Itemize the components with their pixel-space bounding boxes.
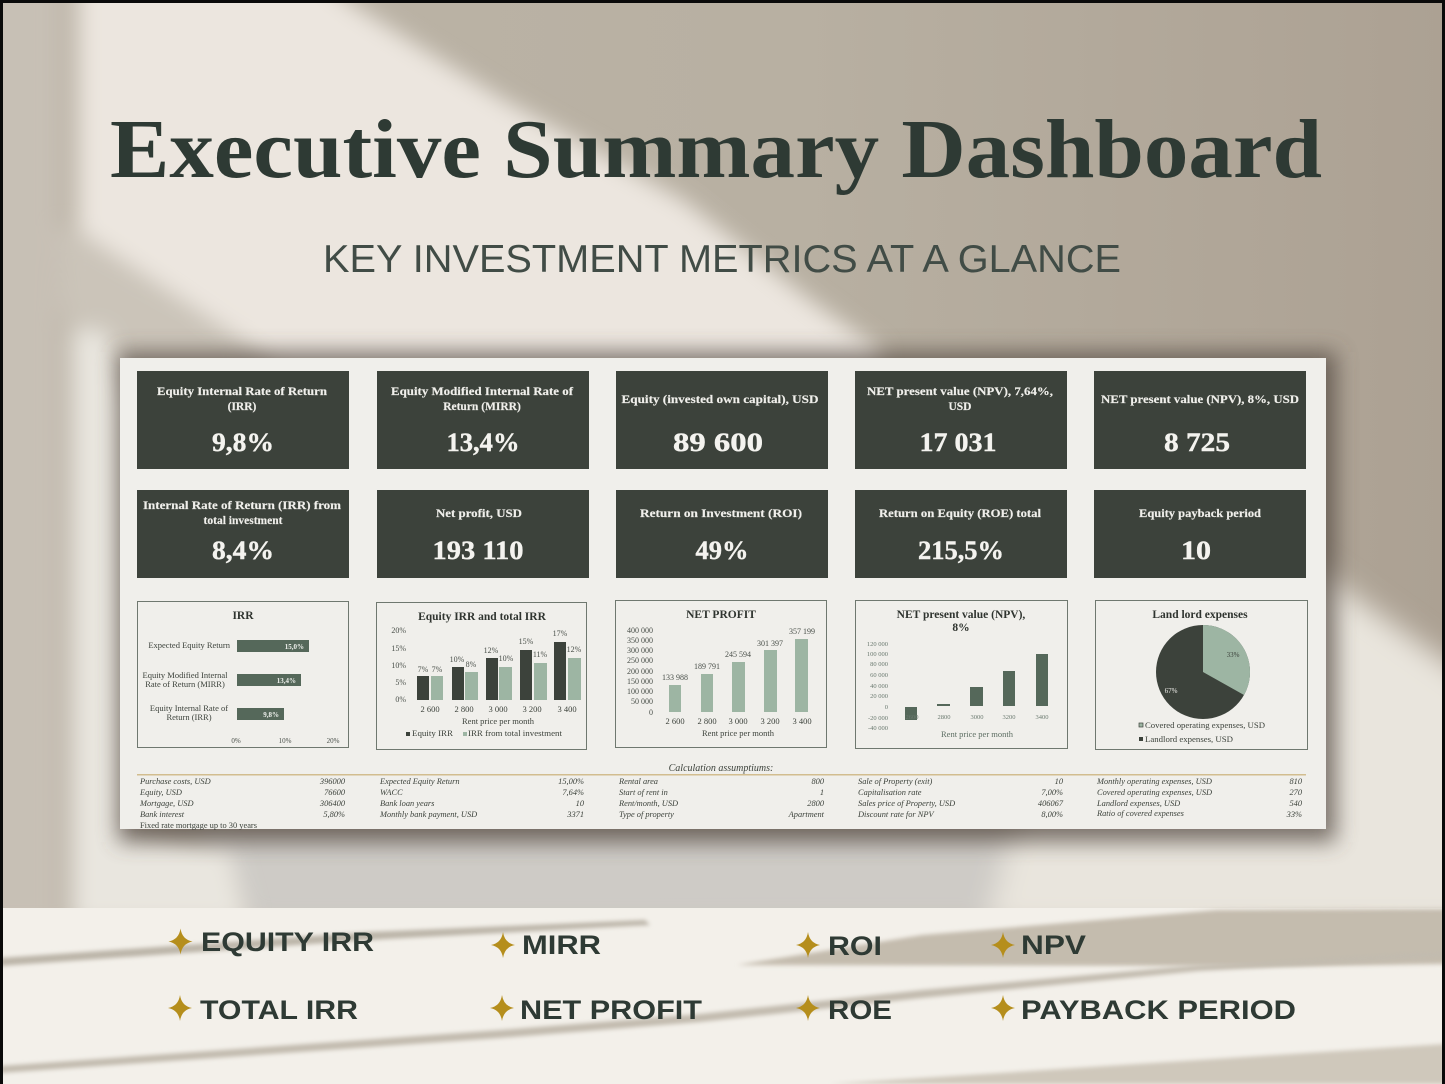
assumptions column 1: Bank interest xyxy=(140,810,185,819)
assumptions column 2: 15,00% xyxy=(558,777,584,786)
chart: net profit xyxy=(616,600,826,748)
chart: NPV 8%: 20 000 xyxy=(870,693,888,700)
KPI card: equity MIRR: 13,4% xyxy=(446,428,520,457)
KPI card: total IRR: total investment xyxy=(204,515,283,527)
assumptions column 5: 33% xyxy=(1286,810,1302,819)
item: payback period: PAYBACK PERIOD xyxy=(1021,995,1296,1025)
assumptions column 1: Fixed rate mortgage up to 30 years xyxy=(140,821,257,830)
chart: net profit: 100 000 xyxy=(627,687,653,696)
chart: net profit: 2 600 xyxy=(665,716,685,726)
assumptions column 4: 406067 xyxy=(1038,799,1064,808)
assumptions column 3: Rent/month, USD xyxy=(618,799,678,808)
KPI card: net profit xyxy=(377,490,589,578)
assumptions column 2: Expected Equity Return xyxy=(379,777,460,786)
chart: IRR horizontal bars: 9,8% xyxy=(263,711,279,719)
chart: equity IRR and total IRR: 3 400 xyxy=(557,704,577,714)
KPI card: NPV 7,64%: 17 031 xyxy=(920,428,996,457)
assumptions column 4: Sale of Property (exit) xyxy=(858,777,933,786)
chart: net profit: 301 397 xyxy=(757,639,783,648)
background: floor with shadow streaks xyxy=(0,908,1445,1084)
KPI card: ROI xyxy=(616,490,828,578)
chart: NPV 8%: 60 000 xyxy=(870,672,888,679)
assumptions column 2 xyxy=(379,777,585,819)
chart: equity IRR and total IRR: 2 800 xyxy=(454,704,474,714)
chart: NPV 8%: 2800 xyxy=(938,714,950,721)
chart: equity IRR and total IRR: 3 000 xyxy=(488,704,508,714)
assumptions column 3: Type of property xyxy=(619,810,674,819)
chart: NPV 8%: 2600 xyxy=(906,714,918,721)
assumptions column 3: 2800 xyxy=(807,799,825,808)
KPI card: ROI: Return on Investment (ROI) xyxy=(640,508,802,520)
assumptions column 1: 396000 xyxy=(319,777,346,786)
item: ROI xyxy=(796,931,882,961)
assumptions column 3 xyxy=(618,777,825,819)
chart: NPV 8%: Rent price per month xyxy=(941,729,1014,739)
assumptions column 5: Covered operating expenses, USD xyxy=(1097,788,1212,797)
chart: equity IRR and total IRR: 3 200 xyxy=(522,704,542,714)
chart: net profit: NET PROFIT xyxy=(686,609,756,621)
assumptions column 4: 10 xyxy=(1055,777,1064,786)
chart: equity IRR and total IRR: 7% xyxy=(418,665,429,674)
item: equity IRR: EQUITY IRR xyxy=(201,927,374,957)
chart: equity IRR and total IRR: 10% xyxy=(450,655,465,664)
subtitle: KEY INVESTMENT METRICS AT A GLANCE xyxy=(323,238,1121,281)
chart: IRR horizontal bars: 20% xyxy=(327,737,340,745)
chart: net profit: 400 000 xyxy=(627,626,653,635)
assumptions column 1: Equity, USD xyxy=(139,788,182,797)
assumptions column 3: 800 xyxy=(811,777,825,786)
KPI card: payback: Equity payback period xyxy=(1139,508,1262,520)
chart: equity IRR and total IRR: Rent price per month xyxy=(462,716,535,726)
chart: IRR horizontal bars: Rate of Return (MIRR) xyxy=(145,679,225,689)
KPI card: equity invested xyxy=(616,371,828,469)
chart: net profit: 0 xyxy=(649,708,653,717)
KPI card: equity IRR: (IRR) xyxy=(228,401,257,413)
chart: NPV 8%: 3200 xyxy=(1002,714,1016,721)
assumptions column 1: Mortgage, USD xyxy=(139,799,194,808)
chart: equity IRR and total IRR: 12% xyxy=(484,646,499,655)
assumptions column 2: Bank loan years xyxy=(380,799,434,808)
chart: landlord expenses pie: 33% xyxy=(1227,651,1240,659)
chart: net profit: 357 199 xyxy=(789,627,815,636)
metric list with gold stars xyxy=(168,927,1296,1025)
chart: NPV 8%: 80 000 xyxy=(870,661,888,668)
chart: equity IRR and total IRR: 5% xyxy=(395,678,406,687)
assumptions column 1 xyxy=(139,777,346,830)
item: net profit: NET PROFIT xyxy=(520,995,703,1025)
chart: IRR horizontal bars: Equity Modified Internal xyxy=(143,670,228,680)
KPI card: equity IRR: 9,8% xyxy=(212,428,274,457)
item: MIRR: MIRR xyxy=(522,930,601,960)
KPI card: equity invested: 89 600 xyxy=(673,428,763,457)
chart: net profit: 3 400 xyxy=(792,716,812,726)
chart: equity IRR and total IRR: IRR from total investment xyxy=(468,728,563,738)
chart: landlord expenses pie xyxy=(1096,600,1308,750)
chart: IRR horizontal bars: Return (IRR) xyxy=(166,712,212,722)
chart: net profit: 350 000 xyxy=(627,636,653,645)
chart: IRR horizontal bars xyxy=(138,602,348,748)
assumptions column 1: 306400 xyxy=(319,799,346,808)
KPI card: total IRR: 8,4% xyxy=(212,536,274,565)
item: ROE xyxy=(796,995,892,1025)
KPI card: ROI: 49% xyxy=(696,536,748,565)
KPI card: NPV 8%: 8 725 xyxy=(1164,428,1230,457)
KPI card: equity MIRR: Equity Modified Internal Rate of xyxy=(391,386,573,398)
KPI card: NPV 8% xyxy=(1094,371,1306,469)
assumptions column 2: 10 xyxy=(576,799,585,808)
chart: NPV 8%: -40 000 xyxy=(868,725,888,732)
assumptions column 5: 810 xyxy=(1289,777,1303,786)
chart: equity IRR and total IRR: 10% xyxy=(391,661,406,670)
assumptions column 2: 3371 xyxy=(566,810,584,819)
chart: IRR horizontal bars: 15,0% xyxy=(285,643,304,651)
assumptions column 4: 7,00% xyxy=(1041,788,1063,797)
chart: net profit: 200 000 xyxy=(627,667,653,676)
chart: IRR horizontal bars: IRR xyxy=(232,610,254,622)
chart: landlord expenses pie: Land lord expenses xyxy=(1152,609,1248,621)
assumptions column 1: 76600 xyxy=(324,788,346,797)
assumptions column 5: 270 xyxy=(1289,788,1303,797)
title: Executive Summary Dashboard xyxy=(110,103,1322,196)
KPI card: net profit: Net profit, USD xyxy=(436,508,522,520)
assumptions column 4: 8,00% xyxy=(1041,810,1063,819)
chart: net profit: 50 000 xyxy=(631,697,653,706)
item: NPV xyxy=(991,930,1086,960)
KPI card: NPV 7,64% xyxy=(855,371,1067,469)
chart: equity IRR and total IRR: 15% xyxy=(519,637,534,646)
assumptions column 5 xyxy=(1096,777,1303,819)
chart: equity IRR and total IRR: 0% xyxy=(395,695,406,704)
chart: IRR horizontal bars: Expected Equity Return xyxy=(148,640,231,650)
chart: equity IRR and total IRR: 20% xyxy=(391,626,406,635)
chart: net profit: 133 988 xyxy=(662,673,688,682)
KPI card: NPV 8%: NET present value (NPV), 8%, USD xyxy=(1101,394,1299,406)
chart: NPV 8%: 3000 xyxy=(970,714,984,721)
chart: net profit: 150 000 xyxy=(627,677,653,686)
chart: net profit: 3 000 xyxy=(728,716,748,726)
chart: equity IRR and total IRR: 2 600 xyxy=(420,704,440,714)
KPI card: NPV 7,64%: USD xyxy=(948,401,972,413)
assumptions column 3: 1 xyxy=(820,788,824,797)
chart: equity IRR and total IRR: 7% xyxy=(432,665,443,674)
calculation assumptions table: Calculation assumptiums: xyxy=(669,763,773,774)
chart: equity IRR and total IRR: Equity IRR and total IRR xyxy=(418,611,547,623)
chart: landlord expenses pie: 67% xyxy=(1165,687,1178,695)
KPI card: payback xyxy=(1094,490,1306,578)
KPI card: equity IRR xyxy=(137,371,349,469)
chart: equity IRR and total IRR: Equity IRR xyxy=(412,728,453,738)
chart: equity IRR and total IRR: 15% xyxy=(391,644,406,653)
chart: NPV 8% xyxy=(856,600,1068,748)
item: ROE: ROE xyxy=(828,995,892,1025)
chart: equity IRR and total IRR xyxy=(376,602,586,750)
chart: net profit: 189 791 xyxy=(694,662,720,671)
assumptions column 5: 540 xyxy=(1289,799,1303,808)
assumptions column 4: Capitalisation rate xyxy=(858,788,922,797)
assumptions column 3: Rental area xyxy=(618,777,658,786)
assumptions column 2: WACC xyxy=(380,788,403,797)
chart: NPV 8%: 0 xyxy=(885,704,888,711)
chart: net profit: 3 200 xyxy=(760,716,780,726)
KPI card: total IRR: Internal Rate of Return (IRR) from xyxy=(143,500,341,512)
assumptions column 3: Apartment xyxy=(788,810,825,819)
chart: net profit: 2 800 xyxy=(697,716,717,726)
calculation assumptions table xyxy=(137,763,1306,830)
chart: NPV 8%: 40 000 xyxy=(870,683,888,690)
KPI card: payback: 10 xyxy=(1181,536,1211,565)
chart: net profit: Rent price per month xyxy=(702,728,775,738)
assumptions column 3: Start of rent in xyxy=(619,788,668,797)
KPI card: ROE: 215,5% xyxy=(918,536,1004,565)
chart: landlord expenses pie: Landlord expenses, USD xyxy=(1145,734,1233,744)
KPI card: ROE: Return on Equity (ROE) total xyxy=(879,508,1041,520)
assumptions column 2: 7,64% xyxy=(562,788,584,797)
chart: NPV 8%: 8% xyxy=(952,622,970,634)
assumptions column 2: Monthly bank payment, USD xyxy=(379,810,477,819)
assumptions column 5: Landlord expenses, USD xyxy=(1096,799,1180,808)
KPI card: ROE xyxy=(855,490,1067,578)
assumptions column 5: Monthly operating expenses, USD xyxy=(1096,777,1212,786)
assumptions column 4 xyxy=(857,777,1064,819)
KPI card: NPV 7,64%: NET present value (NPV), 7,64%, xyxy=(867,386,1053,398)
chart: equity IRR and total IRR: 10% xyxy=(499,654,514,663)
chart: NPV 8%: 100 000 xyxy=(867,651,888,658)
chart: equity IRR and total IRR: 11% xyxy=(533,650,548,659)
item: total IRR: TOTAL IRR xyxy=(200,995,358,1025)
KPI card: equity IRR: Equity Internal Rate of Return xyxy=(157,386,328,398)
chart: net profit: 250 000 xyxy=(627,656,653,665)
assumptions column 5: Ratio of covered expenses xyxy=(1096,809,1184,818)
KPI card: total IRR xyxy=(137,490,349,578)
chart: NPV 8%: 3400 xyxy=(1036,714,1048,721)
item: MIRR xyxy=(491,930,601,960)
panel: dashboard screenshot xyxy=(120,358,1326,830)
assumptions column 1: Purchase costs, USD xyxy=(139,777,211,786)
chart: IRR horizontal bars: 13,4% xyxy=(277,677,296,685)
chart: NPV 8%: 120 000 xyxy=(867,641,888,648)
chart: equity IRR and total IRR: 8% xyxy=(466,660,477,669)
item: ROI: ROI xyxy=(828,931,882,961)
assumptions column 4: Sales price of Property, USD xyxy=(858,799,955,808)
chart: landlord expenses pie: Covered operating expenses, USD xyxy=(1145,720,1265,730)
chart: IRR horizontal bars: 10% xyxy=(279,737,292,745)
panel shadow xyxy=(118,352,1336,842)
item: NPV: NPV xyxy=(1021,930,1086,960)
KPI card: net profit: 193 110 xyxy=(432,536,524,565)
KPI card: equity MIRR: Return (MIRR) xyxy=(443,401,521,413)
chart: net profit: 245 594 xyxy=(725,650,751,659)
assumptions column 4: Discount rate for NPV xyxy=(857,810,934,819)
chart: NPV 8%: NET present value (NPV), xyxy=(897,609,1025,621)
chart: IRR horizontal bars: 0% xyxy=(231,737,241,745)
chart: equity IRR and total IRR: 17% xyxy=(553,629,568,638)
chart: NPV 8%: -20 000 xyxy=(868,715,888,722)
chart: equity IRR and total IRR: 12% xyxy=(567,645,582,654)
assumptions column 1: 5,80% xyxy=(323,810,345,819)
KPI card: equity MIRR xyxy=(377,371,589,469)
chart: IRR horizontal bars: Equity Internal Rate of xyxy=(150,703,228,713)
chart: net profit: 300 000 xyxy=(627,646,653,655)
KPI card: equity invested: Equity (invested own capital), USD xyxy=(622,394,818,406)
